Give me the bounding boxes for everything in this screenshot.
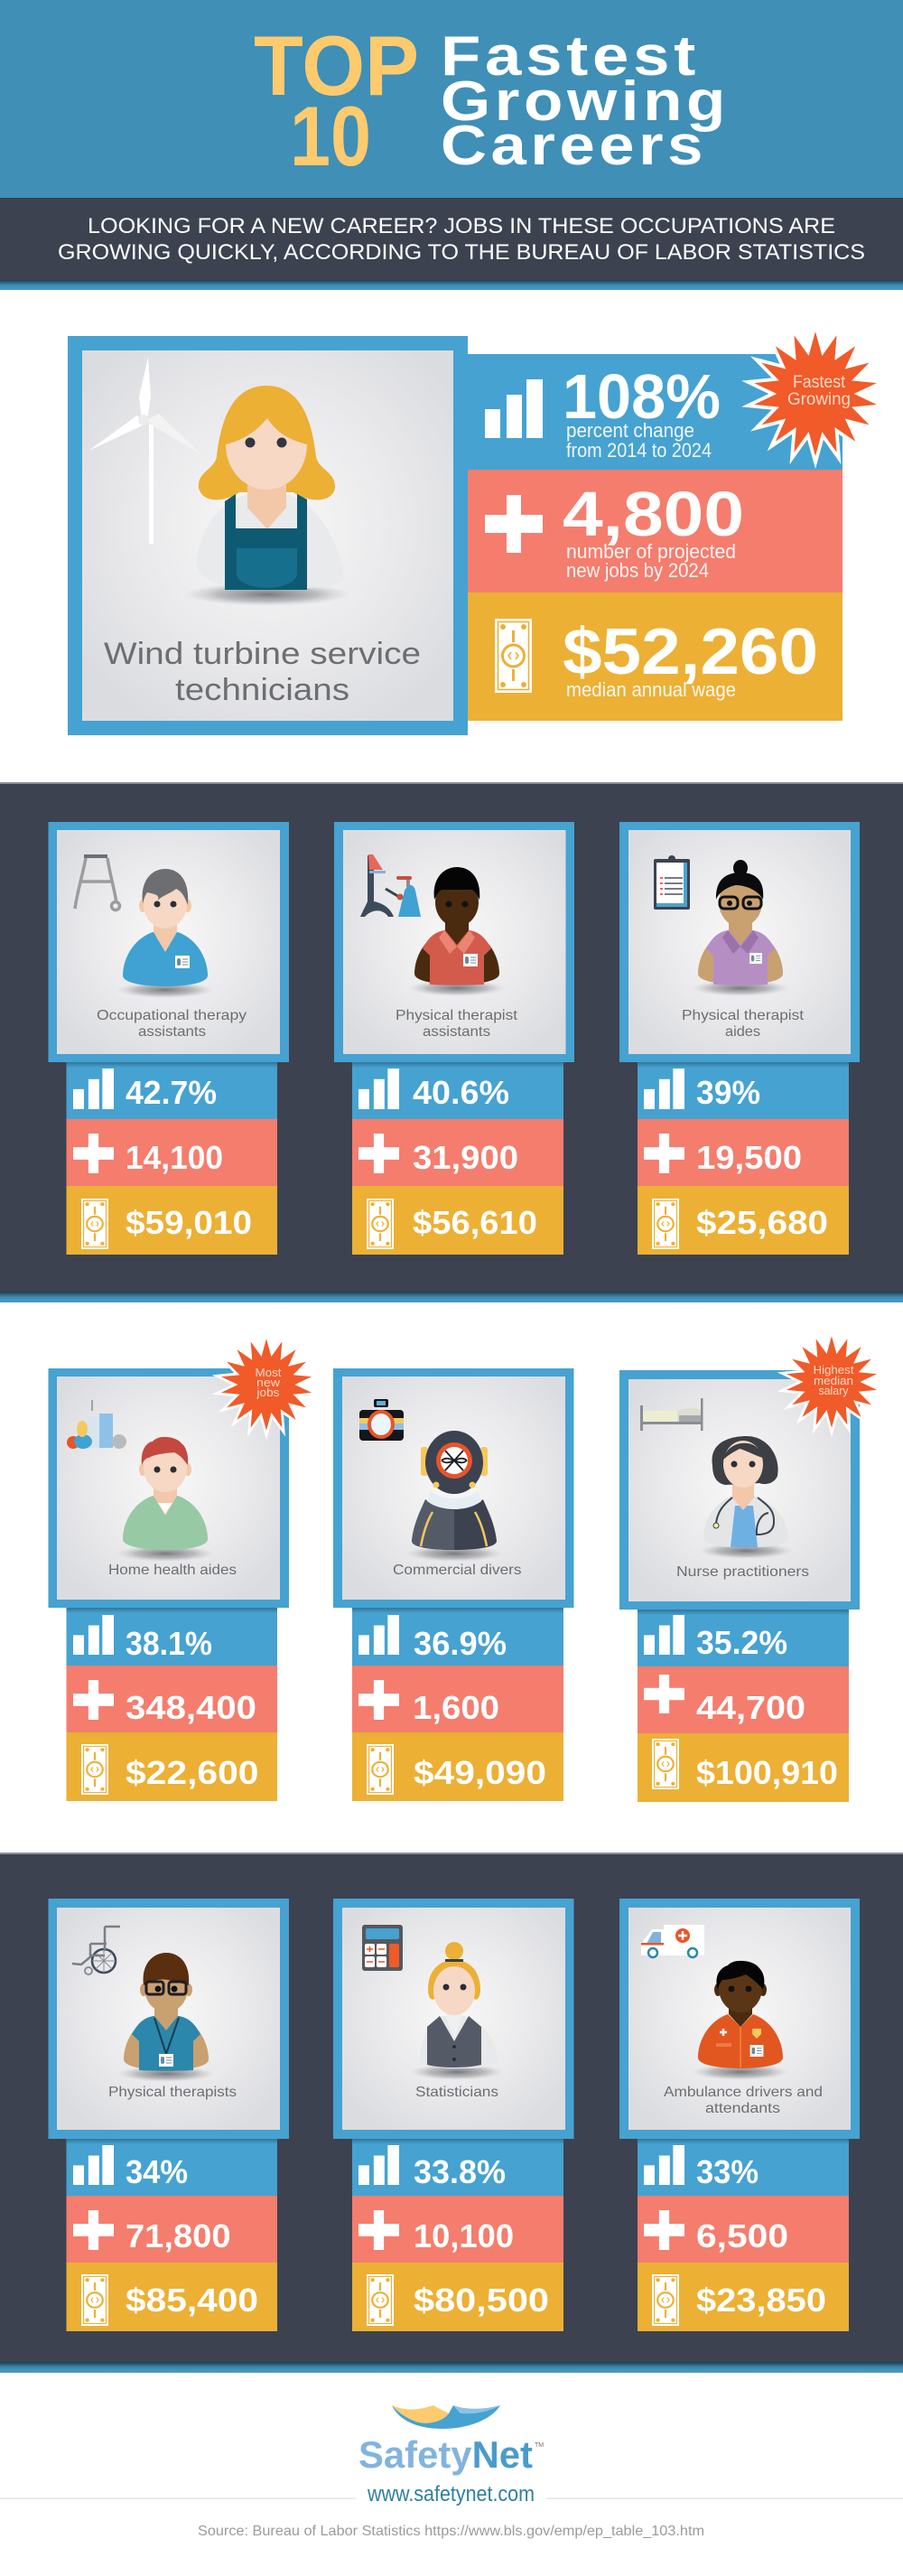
illustration: statistician with vest bbox=[410, 1942, 504, 2080]
stat: percent change bbox=[352, 1062, 563, 1119]
callout: most new jobs bbox=[208, 1327, 325, 1442]
featured stats: percent change: 108% bbox=[563, 361, 721, 432]
icon: exercise bike bbox=[360, 854, 421, 917]
stat: percent change: 42.7% bbox=[126, 1074, 217, 1111]
card: physical therapists bbox=[49, 1899, 289, 2331]
stat: new jobs bbox=[67, 1666, 277, 1732]
illustration: diver bbox=[405, 1431, 503, 1562]
callout: most new jobs: new bbox=[256, 1376, 281, 1389]
stat: percent change bbox=[638, 1062, 849, 1119]
icon: clipboard bbox=[654, 855, 690, 910]
footer: TM bbox=[535, 2442, 544, 2449]
illustration: paramedic bbox=[692, 1961, 789, 2080]
stat: new jobs bbox=[67, 1119, 277, 1186]
frame bbox=[619, 822, 860, 1062]
stat: new jobs bbox=[352, 1666, 563, 1732]
frame bbox=[333, 1899, 574, 2139]
stat: percent change: 33% bbox=[696, 2153, 759, 2190]
stat: wage bbox=[67, 1186, 277, 1255]
source line: Source: Bureau of Labor Statistics https://www.bls.gov/emp/ep_table_103.htm bbox=[198, 2524, 704, 2539]
illustration: person in red polo bbox=[408, 867, 506, 996]
label: Ambulance drivers and bbox=[664, 2085, 823, 2100]
stat: new jobs bbox=[352, 1119, 563, 1186]
label: Physical therapists bbox=[108, 2085, 237, 2100]
stat: wage bbox=[352, 1732, 563, 1801]
stat: wage: $80,500 bbox=[414, 2282, 549, 2319]
label bbox=[664, 2085, 823, 2116]
frame bbox=[49, 1368, 289, 1608]
callout: highest median salary: Highest bbox=[813, 1363, 854, 1377]
frame bbox=[619, 1370, 860, 1610]
label: Physical therapist bbox=[396, 1008, 518, 1023]
featured stats: projected new jobs: 4,800 bbox=[563, 479, 744, 549]
logo: safetynet wordmark: SafetyNet bbox=[358, 2433, 533, 2476]
card: commercial divers bbox=[333, 1368, 574, 1801]
stat: wage: $56,610 bbox=[413, 1204, 537, 1241]
title: top 10 bbox=[254, 18, 419, 183]
icon: ambulance bbox=[641, 1925, 704, 1957]
stat: wage: $22,600 bbox=[126, 1754, 258, 1791]
website: www.safetynet.com bbox=[367, 2482, 535, 2506]
title: top 10: 10 bbox=[290, 89, 371, 183]
icon: calculator bbox=[362, 1925, 403, 1971]
icon: wind turbine bbox=[88, 357, 201, 544]
card: physical therapist assistants bbox=[334, 822, 574, 1255]
stat: percent change: 36.9% bbox=[414, 1625, 507, 1662]
icon: hospital bed bbox=[640, 1398, 703, 1431]
stat: wage: $49,090 bbox=[414, 1754, 546, 1791]
footer bbox=[0, 2405, 903, 2539]
section band: row three bbox=[0, 1853, 903, 2373]
stat: new jobs bbox=[67, 2196, 277, 2263]
stat: percent change: 38.1% bbox=[126, 1625, 212, 1662]
label: assistants bbox=[423, 1024, 490, 1040]
card: occupational therapy assistants bbox=[49, 822, 289, 1255]
featured stats: percent change bbox=[468, 354, 842, 470]
panel: featured career, wind turbine service technicians bbox=[68, 315, 895, 735]
featured stats: projected new jobs: number of projected bbox=[566, 540, 736, 563]
stat: new jobs: 31,900 bbox=[413, 1139, 518, 1176]
card: home health aides bbox=[49, 1327, 325, 1801]
stat: new jobs: 6,500 bbox=[696, 2217, 788, 2254]
callout: fastest growing bbox=[736, 315, 895, 472]
stat: new jobs bbox=[352, 2196, 563, 2263]
illustration: person in blue scrubs bbox=[116, 869, 214, 998]
stat: wage: $23,850 bbox=[696, 2282, 826, 2319]
stat: new jobs: 348,400 bbox=[126, 1689, 256, 1726]
stat: wage bbox=[67, 2263, 277, 2331]
label: Physical therapist bbox=[682, 1008, 805, 1023]
stat: new jobs: 71,800 bbox=[126, 2217, 231, 2254]
section band: row one bbox=[0, 782, 903, 1302]
stat: percent change: 35.2% bbox=[696, 1624, 787, 1661]
stat: wage: $100,910 bbox=[696, 1754, 838, 1791]
illustration: physical therapist with glasses bbox=[117, 1953, 215, 2082]
callout: highest median salary: median bbox=[814, 1374, 853, 1387]
title: fastest growing careers bbox=[441, 25, 730, 177]
stat: wage bbox=[352, 2263, 563, 2331]
stat: new jobs: 10,100 bbox=[414, 2217, 514, 2254]
stat: percent change: 40.6% bbox=[413, 1074, 509, 1111]
subtitle band bbox=[0, 198, 903, 290]
stat: new jobs: 14,100 bbox=[126, 1139, 223, 1176]
icon: walker bbox=[75, 856, 119, 910]
stat: wage bbox=[638, 1186, 849, 1255]
subtitle text: GROWING QUICKLY, ACCORDING TO THE BUREAU OF LABOR STATISTICS bbox=[58, 240, 865, 265]
label: Home health aides bbox=[108, 1563, 237, 1578]
illustration: technician bbox=[184, 386, 350, 606]
stat: new jobs bbox=[638, 2196, 849, 2263]
illustration: person in green top bbox=[116, 1437, 214, 1562]
stat: percent change bbox=[638, 2139, 849, 2196]
label: aides bbox=[725, 1024, 760, 1040]
featured stats: median wage: median annual wage bbox=[566, 678, 736, 701]
frame bbox=[333, 1368, 574, 1608]
featured stats: projected new jobs bbox=[468, 470, 842, 593]
title: fastest growing careers: Growing bbox=[441, 70, 730, 133]
frame bbox=[619, 1899, 860, 2139]
icon: medical supplies bbox=[67, 1400, 126, 1449]
label bbox=[682, 1008, 805, 1040]
card: ambulance drivers and attendants bbox=[619, 1899, 860, 2331]
card: statisticians bbox=[333, 1899, 574, 2331]
label: wind turbine service technicians: technicians bbox=[175, 673, 349, 707]
featured stats: percent change: percent change bbox=[566, 419, 694, 442]
title: fastest growing careers: Careers bbox=[441, 115, 707, 177]
stat: wage bbox=[67, 1732, 277, 1801]
stat: percent change bbox=[352, 2139, 563, 2196]
label: wind turbine service technicians: Wind turbine service bbox=[104, 637, 421, 671]
label: Statisticians bbox=[415, 2085, 498, 2100]
stat: percent change bbox=[638, 1610, 849, 1666]
stat: new jobs bbox=[638, 1119, 849, 1186]
illustration: person in purple polo with bun bbox=[692, 860, 789, 996]
card frame bbox=[68, 336, 468, 735]
stat: percent change bbox=[67, 1608, 277, 1666]
featured stats: median wage bbox=[468, 593, 842, 721]
stat: wage: $85,400 bbox=[126, 2282, 258, 2319]
stat: wage bbox=[352, 1186, 563, 1255]
stat: new jobs: 44,700 bbox=[696, 1689, 805, 1726]
featured stats: percent change: from 2014 to 2024 bbox=[566, 439, 712, 462]
title: top 10: TOP bbox=[254, 18, 419, 113]
stat: percent change bbox=[352, 1608, 563, 1666]
title: fastest growing careers: Fastest bbox=[441, 25, 700, 88]
logo: safetynet swoosh bbox=[392, 2405, 500, 2429]
callout: highest median salary bbox=[773, 1324, 890, 1440]
label: wind turbine service technicians bbox=[104, 637, 421, 707]
label bbox=[396, 1008, 518, 1040]
subtitle text: LOOKING FOR A NEW CAREER? JOBS IN THESE OCCUPATIONS ARE bbox=[88, 214, 835, 238]
icon: wheelchair bbox=[72, 1927, 120, 1974]
label: attendants bbox=[705, 2101, 780, 2116]
stat: new jobs bbox=[638, 1666, 849, 1733]
frame bbox=[49, 822, 289, 1062]
stat: percent change: 34% bbox=[126, 2153, 188, 2190]
stat: percent change: 33.8% bbox=[414, 2153, 506, 2190]
label: assistants bbox=[138, 1024, 206, 1040]
stat: wage: $25,680 bbox=[696, 1204, 828, 1241]
icon: underwater camera bbox=[359, 1399, 404, 1441]
illustration: nurse practitioner bbox=[699, 1436, 793, 1559]
callout: highest median salary: salary bbox=[818, 1384, 849, 1397]
stat: new jobs: 1,600 bbox=[413, 1689, 499, 1726]
card: nurse practitioners bbox=[619, 1324, 890, 1802]
label bbox=[97, 1008, 247, 1040]
stat: percent change bbox=[67, 2139, 277, 2196]
card: physical therapist aides bbox=[619, 822, 860, 1255]
stat: new jobs: 19,500 bbox=[696, 1139, 802, 1176]
stat: wage bbox=[638, 1733, 849, 1802]
callout: fastest growing: Fastest bbox=[793, 373, 846, 392]
stat: percent change: 39% bbox=[696, 1074, 760, 1111]
header banner bbox=[0, 0, 903, 199]
callout: most new jobs: Most bbox=[255, 1366, 282, 1379]
featured stats: projected new jobs: new jobs by 2024 bbox=[566, 559, 709, 582]
frame bbox=[49, 1899, 289, 2139]
frame bbox=[334, 822, 574, 1062]
stat: percent change bbox=[67, 1062, 277, 1119]
callout: fastest growing: Growing bbox=[787, 390, 851, 409]
label: Commercial divers bbox=[393, 1563, 522, 1578]
subtitle text bbox=[58, 214, 865, 265]
stat: wage bbox=[638, 2263, 849, 2331]
label: Occupational therapy bbox=[97, 1008, 247, 1023]
stat: wage: $59,010 bbox=[126, 1204, 252, 1241]
callout: most new jobs: jobs bbox=[256, 1386, 280, 1399]
label: Nurse practitioners bbox=[676, 1564, 809, 1580]
featured stats: median wage: $52,260 bbox=[563, 616, 818, 688]
